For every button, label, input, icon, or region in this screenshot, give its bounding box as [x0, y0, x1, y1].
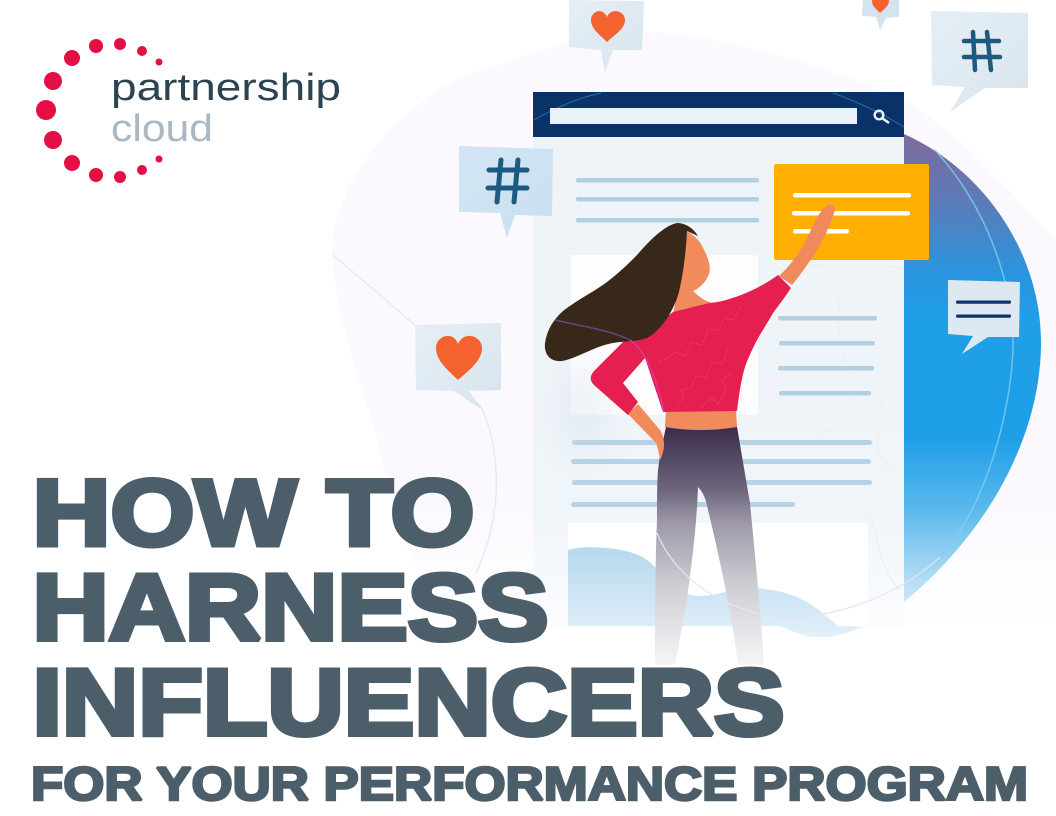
icon: heart: [591, 11, 625, 42]
neck and face: [673, 231, 712, 313]
hand on hip: [628, 404, 664, 459]
bubble: hashtag left: [459, 146, 553, 238]
icon: heart: [436, 336, 482, 380]
callout lines: [792, 193, 911, 234]
text lines top: [576, 178, 759, 222]
arc line: [935, 150, 1013, 557]
text lines right: [778, 316, 877, 396]
image placeholder with hills: [568, 523, 868, 637]
logo wordmark: partnership: partnership: [111, 67, 341, 109]
bubble: heart left: [415, 323, 501, 411]
soft shadow behind figure: [555, 360, 611, 460]
raised arm: [779, 205, 835, 285]
lower arc line: [657, 533, 940, 618]
browser window: [533, 92, 904, 637]
arc across hair and shirt: [555, 320, 664, 412]
orange callout card: [774, 164, 929, 260]
icon: magnifier: [875, 111, 889, 123]
title: [31, 460, 1028, 810]
icon: hashtag: [488, 160, 527, 202]
title line 2: HARNESS: [32, 554, 548, 660]
logo wordmark: cloud: cloud: [111, 108, 213, 150]
red top: [591, 275, 791, 415]
browser header bar: [533, 92, 904, 137]
icon: heart: [872, 0, 889, 13]
text lines lower: [571, 440, 872, 507]
bubble: text lines: [948, 280, 1020, 354]
icon: hashtag: [964, 32, 1000, 70]
search field: [550, 108, 857, 124]
bubble: heart top: [569, 0, 644, 72]
bubble lines: [956, 300, 1011, 318]
title line 1: HOW TO: [32, 460, 474, 565]
figure: woman reaching: [545, 205, 835, 665]
background blob: [332, 33, 1056, 640]
bubble: small heart: [862, 0, 899, 30]
legs: [655, 427, 764, 665]
logo: [36, 38, 341, 183]
header arcs: [534, 93, 904, 127]
shirt texture: [658, 306, 741, 408]
page body: [533, 137, 904, 628]
title line 3: INFLUENCERS: [32, 650, 784, 754]
connector line: [333, 255, 496, 573]
subtitle: FOR YOUR PERFORMANCE PROGRAM: [31, 757, 1028, 810]
map texture: [790, 262, 903, 590]
white card: [571, 255, 758, 415]
waist: [665, 410, 737, 430]
bubble: hashtag top right: [931, 11, 1028, 112]
long hair: [545, 223, 698, 361]
logo dot ring: [36, 38, 162, 183]
blue circle: [904, 134, 1041, 602]
